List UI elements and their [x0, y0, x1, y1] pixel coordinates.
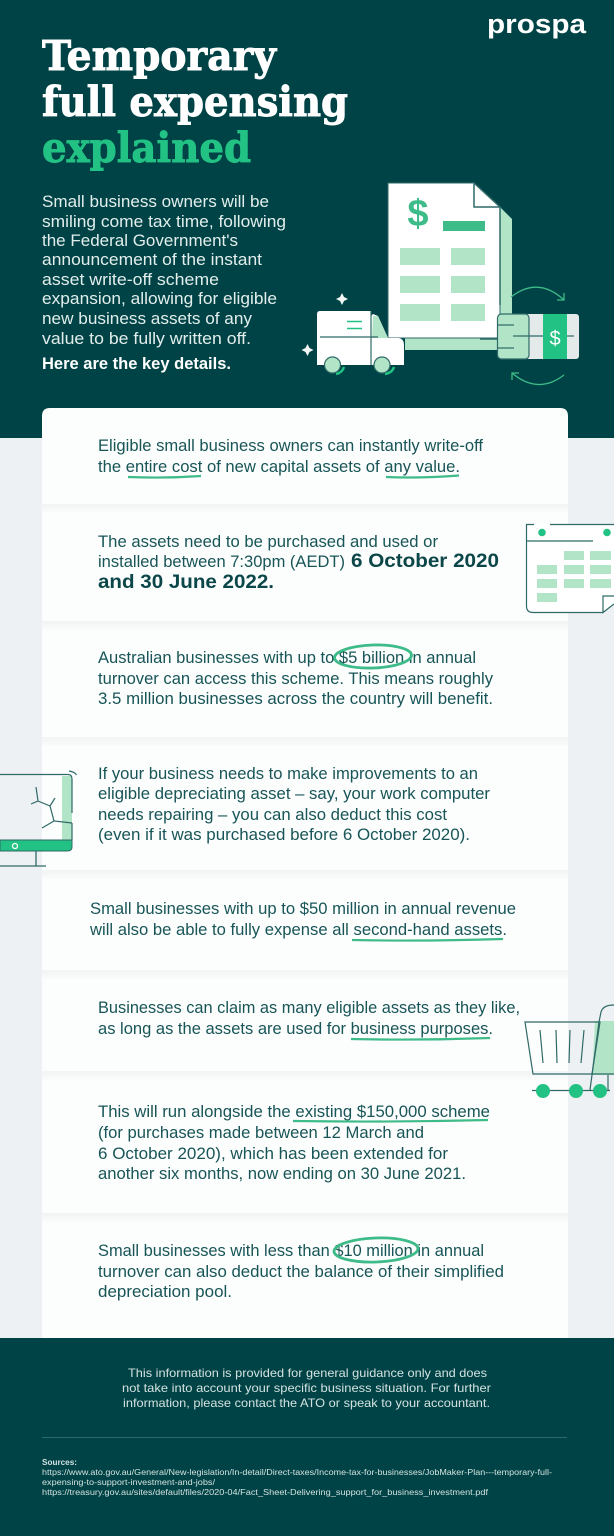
card 5 text: will also be able to fully expense all second-hand assets. — [89, 920, 507, 939]
sources — [42, 1457, 552, 1497]
sources: Sources: — [42, 1457, 77, 1467]
card 2 text: The assets need to be purchased and used or — [98, 532, 438, 551]
card 2 text: 6 October 2020 — [351, 551, 499, 572]
cash and hand — [498, 314, 579, 359]
title: full expensing — [42, 78, 348, 126]
card 3 text: turnover can access this scheme. This means roughly — [98, 669, 493, 688]
intro text: Small business owners will be — [42, 192, 269, 211]
sources: https://www.ato.gov.au/General/New-legislation/In-detail/Direct-taxes/Income-tax-for-businesses/JobMaker-Plan---temporary-full- — [42, 1467, 552, 1477]
card 8 text: depreciation pool. — [98, 1282, 232, 1301]
card 8 text — [98, 1237, 504, 1301]
disclaimer text — [122, 1366, 491, 1410]
logo: prospa — [487, 9, 587, 39]
intro text: Here are the key details. — [42, 354, 231, 373]
exchange arrows — [511, 287, 564, 385]
intro text — [42, 192, 286, 373]
intro text: expansion, allowing for eligible — [42, 289, 277, 308]
disclaimer text: This information is provided for general guidance only and does — [128, 1366, 487, 1380]
intro text: new business assets of any — [42, 309, 252, 328]
card 4 text: needs repairing – you can also deduct this cost — [98, 805, 447, 824]
sources: https://treasury.gov.au/sites/default/files/2020-04/Fact_Sheet-Delivering_support_for_business_investment.pdf — [42, 1487, 489, 1497]
icon: shopping cart — [525, 1005, 614, 1098]
card 3 text: Australian businesses with up to $5 billion in annual — [98, 648, 476, 667]
card 1 text — [98, 436, 483, 478]
card 4 text: If your business needs to make improvements to an — [98, 764, 478, 783]
card 1 text: Eligible small business owners can instantly write-off — [98, 436, 483, 455]
card 3 text: 3.5 million businesses across the country will benefit. — [98, 689, 493, 708]
icon: broken monitor — [0, 771, 76, 866]
intro text: the Federal Government's — [42, 231, 238, 250]
sources: expensing-to-support-investment-and-jobs/ — [42, 1477, 216, 1487]
intro text: asset write-off scheme — [42, 270, 219, 289]
card 2 text: and 30 June 2022. — [98, 572, 274, 593]
title — [42, 32, 348, 172]
card list panel — [0, 408, 614, 1338]
card 2 text — [98, 532, 499, 593]
truck — [317, 311, 404, 374]
card 7 text — [98, 1102, 490, 1183]
card 5 text — [89, 899, 516, 941]
card 7 text: 6 October 2020), which has been extended for — [98, 1144, 448, 1163]
sparkles — [302, 293, 348, 356]
card 1 text: the entire cost of new capital assets of any value. — [98, 457, 460, 476]
card 5 text: Small businesses with up to $50 million in annual revenue — [90, 899, 516, 918]
card 4 text: (even if it was purchased before 6 October 2020). — [98, 825, 470, 844]
card 6 text: as long as the assets are used for business purposes. — [98, 1019, 493, 1038]
card 6 text: Businesses can claim as many eligible assets as they like, — [98, 998, 520, 1017]
card 4 text — [98, 764, 490, 844]
cash and hand: $ — [549, 328, 561, 350]
title: Temporary — [42, 32, 277, 80]
card 8 text: Small businesses with less than $10 million in annual — [98, 1241, 484, 1260]
intro text: value to be fully written off. — [42, 329, 251, 348]
disclaimer text: not take into account your specific business situation. For further — [122, 1381, 491, 1395]
intro text: smiling come tax time, following — [42, 212, 286, 231]
card 2 text: installed between 7:30pm (AEDT) — [98, 552, 345, 571]
card 7 text: another six months, now ending on 30 June 2021. — [98, 1164, 466, 1183]
icon: calendar — [526, 524, 614, 613]
card 4 text: eligible depreciating asset – say, your work computer — [98, 784, 490, 803]
disclaimer text: information, please contact the ATO or speak to your accountant. — [123, 1396, 490, 1410]
card 3 text — [98, 644, 493, 708]
title: explained — [42, 124, 251, 172]
card 8 text: turnover can also deduct the balance of their simplified — [98, 1262, 504, 1281]
illustration: invoice, truck and cash — [302, 183, 579, 385]
intro text: announcement of the instant — [42, 250, 262, 269]
card 7 text: This will run alongside the existing $150,000 scheme — [98, 1102, 490, 1121]
footer panel — [0, 1338, 614, 1536]
illustration: invoice, truck and cash: $ — [407, 193, 429, 235]
card 7 text: (for purchases made between 12 March and — [98, 1123, 424, 1142]
card 6 text — [98, 998, 520, 1040]
